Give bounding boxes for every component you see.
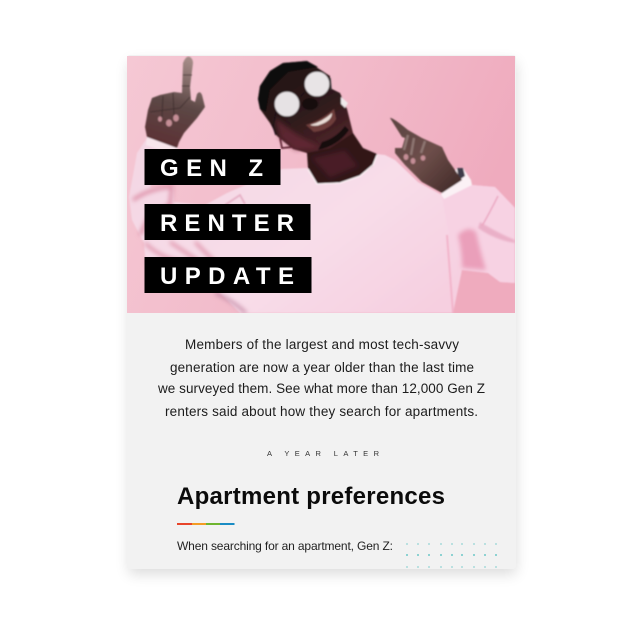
title: GEN Z RENTER UPDATE: GEN Z <box>160 155 263 182</box>
intro paragraph: generation are now a year older than the last time <box>170 360 474 375</box>
cheek highlights <box>275 118 320 150</box>
intro paragraph <box>157 337 485 419</box>
left hand fingernails <box>158 114 179 126</box>
card <box>127 55 516 569</box>
title: GEN Z RENTER UPDATE: RENTER <box>160 210 294 237</box>
hero photo: man in pink sweatshirt and round sunglasses pointing up <box>127 56 515 313</box>
left hand pointing up <box>145 57 205 148</box>
card shadow <box>129 62 516 574</box>
collar trim <box>308 155 377 184</box>
sweatshirt: body and sleeves <box>129 140 462 313</box>
right hand pointing up <box>390 118 462 193</box>
mouth and teeth <box>306 109 336 132</box>
left cuff <box>146 136 178 149</box>
title: GEN Z RENTER UPDATE <box>144 149 312 293</box>
heading: Apartment preferences: Apartment preferences <box>177 483 445 510</box>
left hand fingers <box>150 75 192 117</box>
cuff <box>441 168 472 199</box>
nose <box>302 98 318 110</box>
neck shading <box>312 150 358 178</box>
multicolour divider <box>177 523 234 525</box>
right hand fingers <box>404 135 425 155</box>
sunglasses <box>273 92 305 135</box>
intro paragraph: Members of the largest and most tech-savvy <box>185 337 459 352</box>
head <box>258 61 353 153</box>
title: GEN Z RENTER UPDATE: UPDATE <box>160 263 294 290</box>
intro paragraph: we surveyed them. See what more than 12,000 Gen Z <box>157 381 485 396</box>
intro paragraph: renters said about how they search for apartments. <box>165 404 478 419</box>
neck <box>306 132 378 184</box>
subheading: When searching for an apartment, Gen Z: <box>177 539 393 553</box>
section label: A YEAR LATER: A YEAR LATER <box>267 449 380 458</box>
sleeve folds <box>442 185 515 283</box>
decorative dot grid <box>406 543 497 568</box>
beard <box>318 126 349 150</box>
